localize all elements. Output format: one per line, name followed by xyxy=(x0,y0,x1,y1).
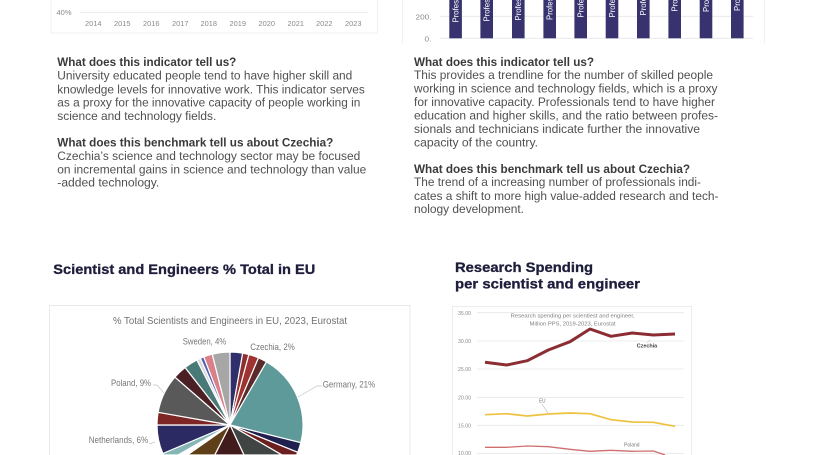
line chart title xyxy=(511,314,635,328)
text block: left explanation: What does this indicator tell us? xyxy=(57,55,236,69)
panel: research spending line chart xyxy=(452,306,692,455)
y axis labels: 30.00 xyxy=(458,339,471,345)
bar labels xyxy=(451,0,742,22)
line chart title: Research spending per scientiest and engineer, xyxy=(511,314,635,320)
panel: top-left cropped line chart: 40% xyxy=(56,8,72,17)
pie labels: Czechia, 2% xyxy=(250,342,295,352)
text block: right explanation xyxy=(413,55,718,216)
pie labels: Germany, 21% xyxy=(323,380,375,390)
panel: top-left cropped line chart: 2018 xyxy=(200,19,217,28)
text block: right explanation: sionals and technicians indicate further the innovative xyxy=(414,122,700,136)
pie labels: Sweden, 4% xyxy=(183,336,226,346)
panel: top-right cropped bar chart: 200. xyxy=(416,12,432,22)
text block: right explanation: This provides a trendline for the number of skilled people xyxy=(414,68,713,82)
text block: right explanation: What does this indicator tell us? xyxy=(414,55,594,69)
text block: left explanation: University educated people tend to have higher skill and xyxy=(57,69,352,83)
series labels: EU xyxy=(539,398,546,404)
panel: top-left cropped line chart: 2021 xyxy=(288,19,304,28)
series labels xyxy=(539,340,658,448)
heading: scientists share: Scientist and Engineers % Total in EU xyxy=(53,261,315,277)
text block: right explanation: for innovative capacity. Professionals tend to have higher xyxy=(414,95,715,109)
panel: top-left cropped line chart: 2017 xyxy=(172,19,188,28)
text block: left explanation: on incremental gains in science and technology than value xyxy=(57,162,367,176)
y axis labels xyxy=(458,311,471,455)
panel: top-left cropped line chart xyxy=(51,0,378,33)
pie labels xyxy=(89,336,375,445)
panel: top-left cropped line chart: 2014 xyxy=(85,19,102,28)
pie chart title: % Total Scientists and Engineers in EU, 2023, Eurostat xyxy=(113,315,347,327)
text block: left explanation: What does this benchmark tell us about Czechia? xyxy=(57,135,333,149)
text block: left explanation: knowledge levels for innovative work. This indicator serves xyxy=(57,82,365,96)
text block: right explanation: cates a shift to more high value-added research and tech- xyxy=(414,189,718,203)
text block: right explanation: working in science and technology fields, which is a proxy xyxy=(413,82,718,96)
y axis labels: 20.00 xyxy=(458,396,471,402)
pie slices xyxy=(157,352,303,455)
text block: right explanation: nology development. xyxy=(414,202,524,216)
panel: top-right cropped bar chart: 0. xyxy=(424,34,432,44)
heading: research spending xyxy=(455,259,641,292)
heading: research spending: per scientist and engineer xyxy=(455,276,641,292)
panel: top-left cropped line chart: 2022 xyxy=(316,19,332,28)
line: Czechia xyxy=(485,329,675,365)
pie labels: Netherlands, 6% xyxy=(89,435,148,445)
series labels: Czechia xyxy=(637,344,658,350)
heading: research spending: Research Spending xyxy=(455,259,593,275)
line chart title: Million PPS, 2019-2023, Eurostat xyxy=(530,322,616,328)
bars: professionals xyxy=(449,0,744,38)
panel: top-left cropped line chart: 2015 xyxy=(114,19,130,28)
panel: top-left cropped line chart: 2023 xyxy=(345,19,362,28)
y axis labels: 25.00 xyxy=(458,367,471,373)
line: EU xyxy=(485,413,675,426)
series labels: Poland xyxy=(624,442,640,448)
chart gridlines xyxy=(477,313,684,453)
text block: left explanation: science and technology fields. xyxy=(57,109,216,123)
text block: left explanation xyxy=(57,55,367,190)
text block: right explanation: What does this benchmark tell us about Czechia? xyxy=(414,162,690,176)
text block: left explanation: as a proxy for the innovative capacity of people working in xyxy=(57,96,360,110)
panel: top-right cropped bar chart xyxy=(402,0,764,44)
text block: right explanation: The trend of a increasing number of professionals indi- xyxy=(414,175,701,189)
line: Poland xyxy=(485,446,665,455)
y axis labels: 35.00 xyxy=(458,311,471,317)
text block: right explanation: capacity of the country. xyxy=(414,135,538,149)
text block: left explanation: -added technology. xyxy=(57,176,159,190)
panel: top-left cropped line chart: 2016 xyxy=(143,19,160,28)
text block: left explanation: Czechia’s science and technology sector may be focused xyxy=(57,149,360,163)
pie labels: Poland, 9% xyxy=(111,378,151,388)
panel: top-left cropped line chart: 2020 xyxy=(258,19,275,28)
y axis labels: 15.00 xyxy=(458,424,471,430)
pie leader lines xyxy=(149,385,322,444)
text block: right explanation: education and higher skills, and the ratio between profes- xyxy=(414,109,718,123)
panel: top-left cropped line chart: 2019 xyxy=(230,19,246,28)
panel: pie chart xyxy=(50,306,410,455)
